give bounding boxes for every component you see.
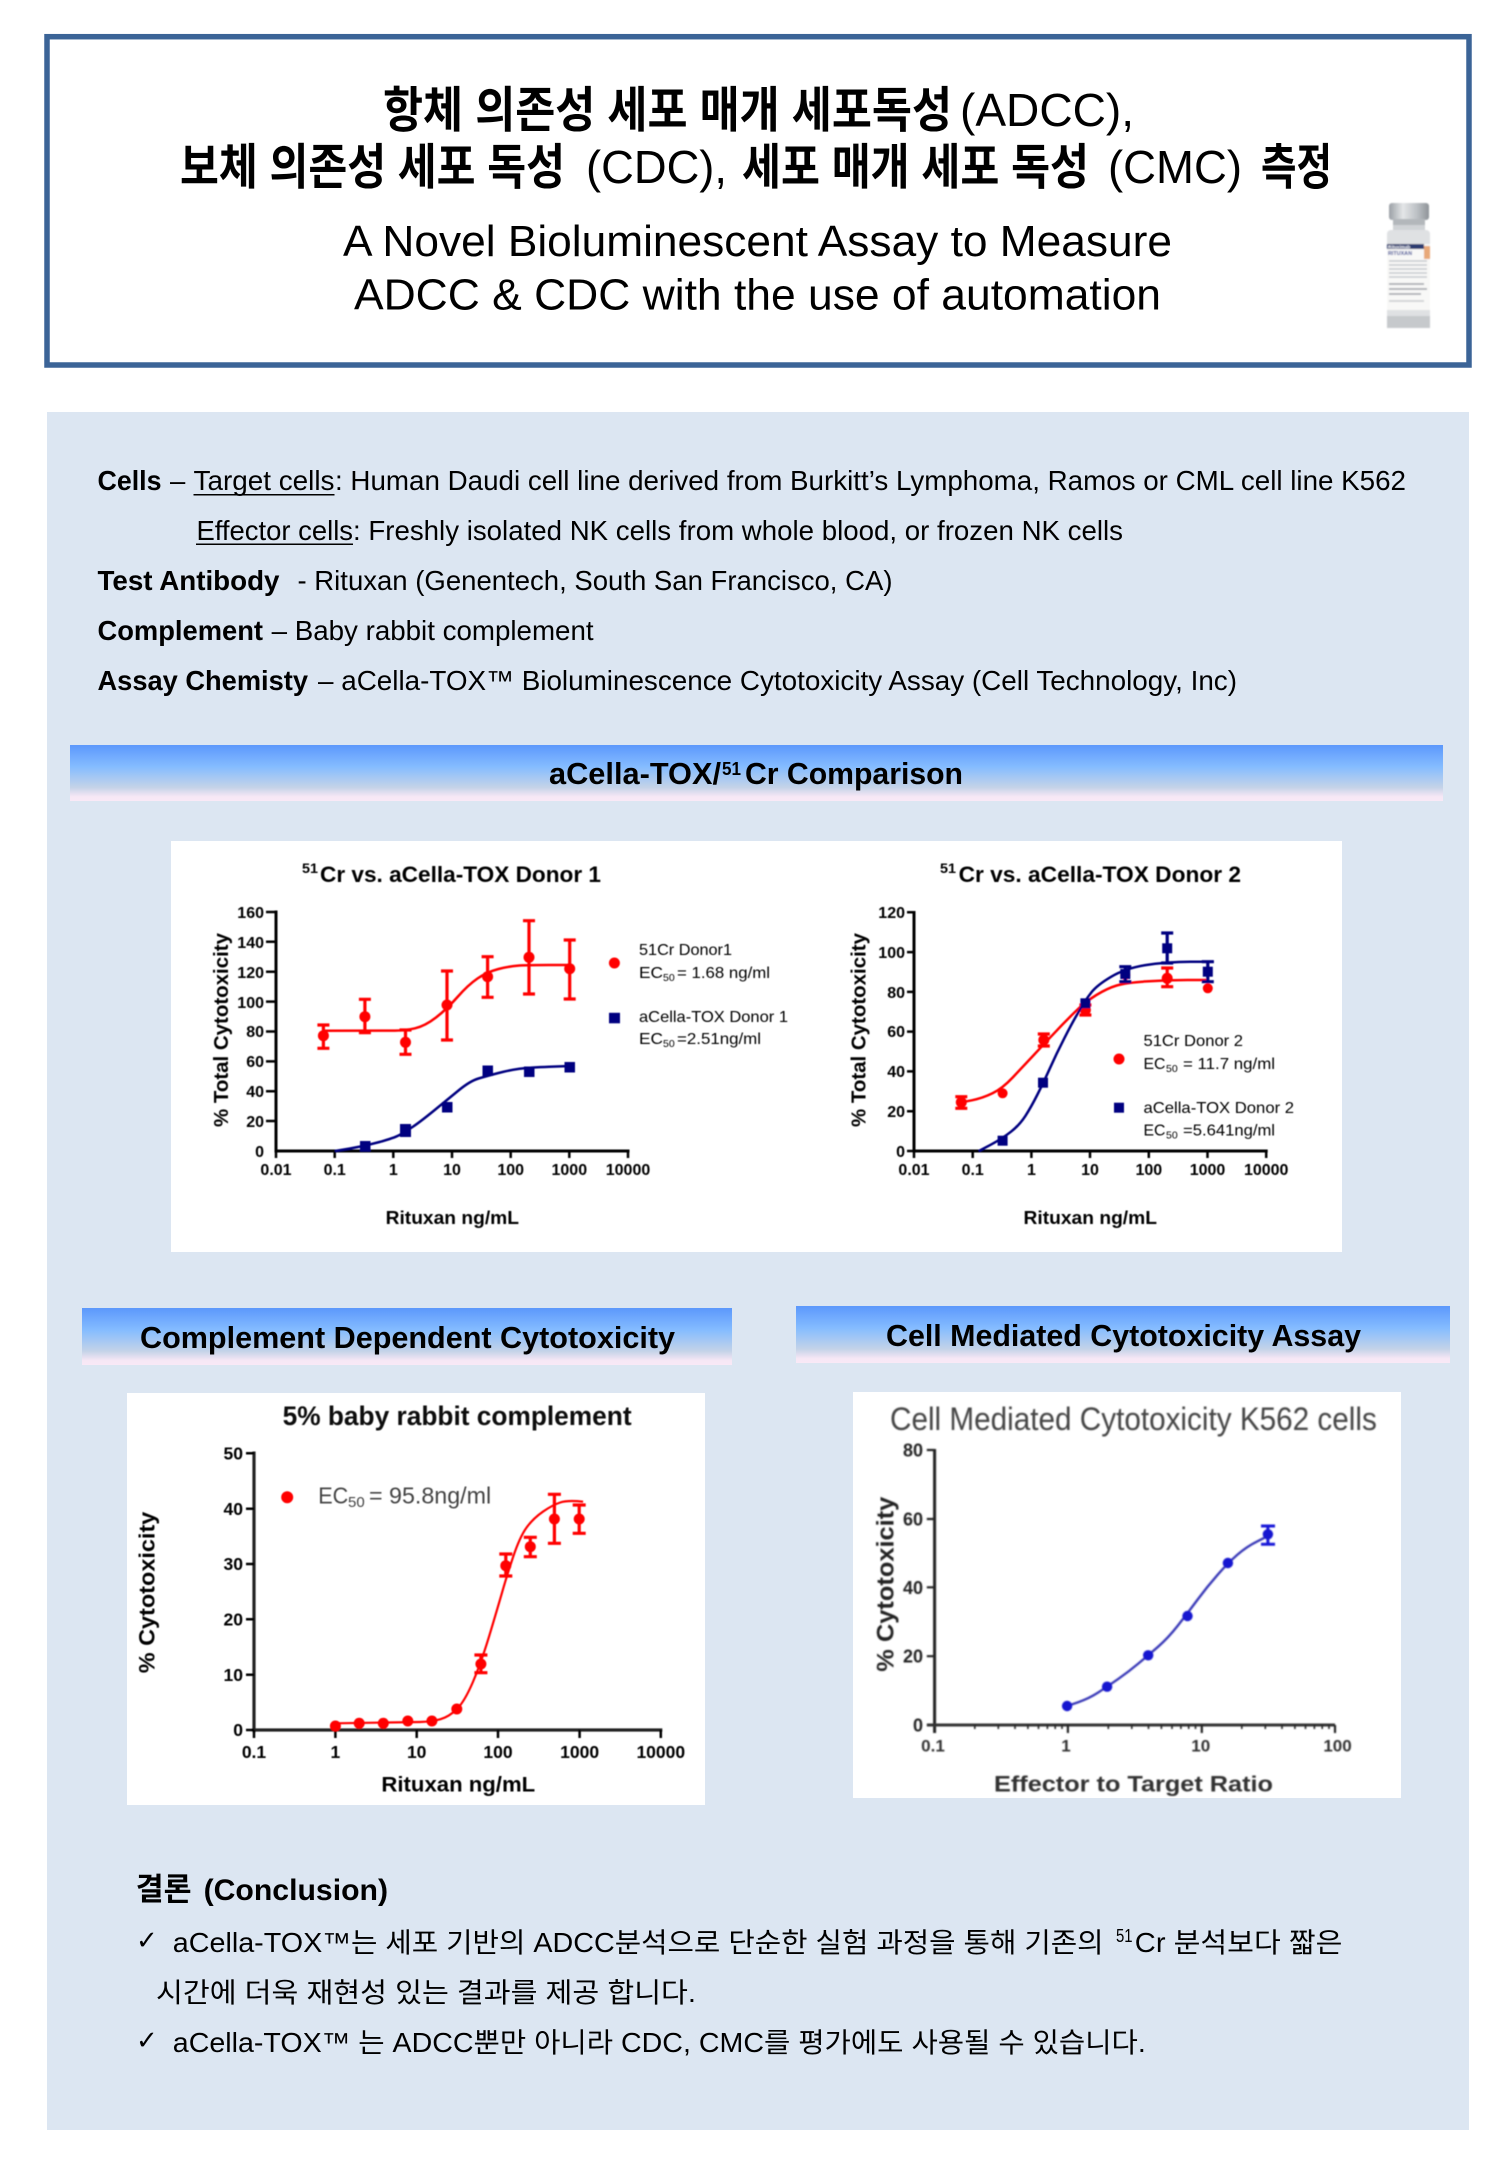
axes: 100 bbox=[483, 1742, 513, 1762]
row: assay chemistry: – aCella-TOX™ Bioluminescence Cytotoxicity Assay (Cell Technology, Inc) bbox=[318, 665, 1237, 696]
axes: 0.1 bbox=[921, 1737, 945, 1756]
axes: 80 bbox=[903, 1440, 923, 1460]
x axis label: Rituxan ng/mL bbox=[381, 1774, 535, 1797]
axes donor 1: 1000 bbox=[552, 1162, 587, 1179]
axes: 10 bbox=[224, 1665, 243, 1685]
chart title donor 2: 51 bbox=[940, 860, 956, 876]
axes: 10 bbox=[1191, 1737, 1210, 1756]
axes donor 2: 80 bbox=[887, 985, 905, 1002]
axes donor 2: 1 bbox=[1027, 1162, 1036, 1179]
heading banner: comparison: 51 bbox=[722, 759, 741, 779]
legend donor 2: EC bbox=[1144, 1123, 1166, 1140]
row: complement: Complement bbox=[98, 615, 263, 646]
y axis label: % Cytotoxicity bbox=[873, 1496, 900, 1672]
icon: Rituxan vial: RITUXAN bbox=[1388, 251, 1412, 257]
series: aCella-TOX donor 2 bbox=[979, 933, 1214, 1151]
axes: 30 bbox=[224, 1554, 243, 1574]
title line 1: 항체 의존성 세포 매개 세포독성 bbox=[383, 84, 952, 138]
row: cells target: : Human Daudi cell line derived from Burkitt’s Lymphoma, Ramos or CML cell line K562 bbox=[335, 465, 1406, 496]
axes donor 2: 100 bbox=[878, 945, 905, 962]
legend donor 2: EC bbox=[1144, 1056, 1166, 1073]
subtitle: ADCC & CDC with the use of automation bbox=[354, 270, 1161, 320]
axes donor 2: 20 bbox=[887, 1104, 905, 1121]
heading banner: comparison: Cr Comparison bbox=[745, 757, 963, 791]
legend donor 1: =2.51ng/ml bbox=[677, 1031, 761, 1048]
chart: cell mediated cytotoxicity bbox=[853, 1392, 1401, 1798]
axes: 0 bbox=[913, 1716, 923, 1736]
row: test antibody: Test Antibody bbox=[98, 565, 280, 596]
row: cells target: Target cells bbox=[194, 465, 334, 496]
header box bbox=[47, 37, 1469, 365]
legend: = 95.8ng/ml bbox=[369, 1482, 491, 1508]
legend donor 1: aCella-TOX Donor 1 bbox=[639, 1009, 788, 1026]
legend donor 1: EC bbox=[639, 1031, 663, 1048]
legend donor 1: 50 bbox=[663, 972, 675, 984]
legend donor 1: = 1.68 ng/ml bbox=[677, 965, 770, 982]
heading banner: cell mediated cytotoxicity: Cell Mediated Cytotoxicity Assay bbox=[886, 1319, 1361, 1353]
axes: 60 bbox=[903, 1510, 923, 1530]
subtitle bbox=[343, 217, 1172, 320]
legend donor 1: 50 bbox=[663, 1038, 675, 1050]
row: assay chemistry: Assay Chemisty bbox=[98, 665, 309, 696]
axes donor 2: 0.1 bbox=[962, 1162, 984, 1179]
axes: 100 bbox=[1323, 1737, 1352, 1756]
chart: donor 1 bbox=[211, 860, 788, 1228]
row: complement bbox=[98, 615, 594, 646]
legend donor 1 bbox=[609, 942, 788, 1050]
legend bbox=[281, 1482, 491, 1511]
axes donor 1: 10 bbox=[443, 1162, 461, 1179]
axes donor 1: 100 bbox=[237, 995, 264, 1012]
axes donor 2: 10000 bbox=[1244, 1162, 1289, 1179]
axes donor 1: 80 bbox=[246, 1024, 264, 1041]
bullet 1 bbox=[136, 1926, 1342, 2008]
axes donor 1: 140 bbox=[237, 935, 264, 952]
axes donor 2: 0.01 bbox=[898, 1162, 930, 1179]
axes donor 1: 0.01 bbox=[260, 1162, 292, 1179]
legend donor 2: 50 bbox=[1166, 1063, 1178, 1075]
axes bbox=[903, 1440, 1352, 1756]
axes donor 2: 1000 bbox=[1190, 1162, 1225, 1179]
axes donor 2: 10 bbox=[1081, 1162, 1099, 1179]
title line 2: (CDC), bbox=[586, 141, 727, 193]
axes donor 1: 0.1 bbox=[324, 1162, 346, 1179]
title line 2 bbox=[180, 141, 1332, 195]
axes donor 2 bbox=[878, 905, 1289, 1179]
axes: 1000 bbox=[560, 1742, 599, 1762]
heading banner: complement dependent cytotoxicity: Complement Dependent Cytotoxicity bbox=[140, 1321, 675, 1355]
chart: donor 2 bbox=[849, 860, 1294, 1228]
conclusion heading bbox=[136, 1872, 388, 1907]
axes donor 1: 100 bbox=[497, 1162, 524, 1179]
series: 51Cr donor 1 bbox=[317, 921, 576, 1054]
icon: Rituxan vial: Rituximab bbox=[1388, 245, 1410, 250]
bullet 1: 51 bbox=[1116, 1926, 1133, 1946]
axes: 40 bbox=[903, 1578, 923, 1598]
axes: 20 bbox=[224, 1610, 243, 1630]
axes: 0 bbox=[233, 1720, 243, 1740]
text block: materials bbox=[98, 465, 1406, 696]
axes donor 2: 100 bbox=[1135, 1162, 1162, 1179]
row: cells target: – bbox=[170, 465, 186, 496]
bullet 1: 시간에 더욱 재현성 있는 결과를 제공 합니다. bbox=[156, 1977, 696, 2008]
chart title: 5% baby rabbit complement bbox=[283, 1401, 632, 1431]
conclusion heading: 결론 bbox=[136, 1872, 192, 1907]
axes donor 1 bbox=[237, 905, 650, 1179]
axes: 10000 bbox=[636, 1742, 685, 1762]
chart title donor 1: Cr vs. aCella-TOX Donor 1 bbox=[320, 862, 601, 887]
x axis label: Effector to Target Ratio bbox=[994, 1772, 1273, 1797]
axes: 1 bbox=[331, 1742, 341, 1762]
axes donor 1: 120 bbox=[237, 965, 264, 982]
heading banner: complement dependent cytotoxicity bbox=[82, 1308, 732, 1365]
axes donor 1: 20 bbox=[246, 1114, 264, 1131]
bullet 1: Cr 분석보다 짧은 bbox=[1135, 1927, 1342, 1958]
axes donor 1: 1 bbox=[389, 1162, 398, 1179]
legend donor 1: EC bbox=[639, 965, 663, 982]
legend donor 2 bbox=[1114, 1033, 1294, 1142]
axes donor 1: 0 bbox=[255, 1144, 264, 1161]
bullet 1: aCella-TOX™는 세포 기반의 ADCC분석으로 단순한 실험 과정을 통해 기존의 bbox=[173, 1927, 1104, 1958]
chart title donor 2: Cr vs. aCella-TOX Donor 2 bbox=[959, 862, 1241, 887]
axes bbox=[224, 1444, 685, 1762]
axes donor 1: 10000 bbox=[606, 1162, 650, 1179]
axes: 1 bbox=[1061, 1737, 1071, 1756]
axes: 0.1 bbox=[242, 1742, 266, 1762]
text block: conclusion bbox=[136, 1872, 1342, 2058]
bullet 1: ✓ bbox=[136, 1926, 158, 1956]
bullet 2: ✓ bbox=[136, 2026, 158, 2056]
row: cells target: Cells bbox=[98, 465, 162, 496]
series: 51Cr donor 2 bbox=[955, 968, 1213, 1108]
legend: EC bbox=[318, 1482, 348, 1508]
series: cytotoxicity curve bbox=[1062, 1526, 1275, 1711]
subtitle: A Novel Bioluminescent Assay to Measure bbox=[343, 217, 1172, 266]
panel: comparison charts bbox=[171, 841, 1342, 1252]
axes: 10 bbox=[407, 1742, 427, 1762]
y axis label: % Cytotoxicity bbox=[134, 1511, 159, 1673]
heading banner: comparison bbox=[70, 745, 1443, 801]
row: complement: – Baby rabbit complement bbox=[272, 615, 594, 646]
chart title: Cell Mediated Cytotoxicity K562 cells bbox=[890, 1401, 1377, 1437]
axes: 50 bbox=[224, 1444, 243, 1464]
heading banner: comparison: aCella-TOX/ bbox=[549, 757, 722, 791]
axes donor 1: 60 bbox=[246, 1054, 264, 1071]
title line 2: 세포 매개 세포 독성 bbox=[742, 141, 1089, 195]
x axis label donor 1: Rituxan ng/mL bbox=[386, 1207, 519, 1228]
row: test antibody: - Rituxan (Genentech, South San Francisco, CA) bbox=[298, 565, 892, 596]
legend donor 2: =5.641ng/ml bbox=[1183, 1123, 1275, 1140]
axes donor 2: 0 bbox=[896, 1144, 905, 1161]
axes: 20 bbox=[903, 1646, 923, 1666]
title line 1: (ADCC), bbox=[960, 84, 1134, 136]
axes donor 1: 40 bbox=[246, 1084, 264, 1101]
legend donor 1: 51Cr Donor1 bbox=[639, 942, 732, 959]
heading banner: cell mediated cytotoxicity bbox=[796, 1306, 1450, 1363]
axes donor 2: 40 bbox=[887, 1064, 905, 1081]
conclusion heading: (Conclusion) bbox=[204, 1874, 388, 1907]
y axis label donor 1: % Total Cytotoxicity bbox=[211, 932, 233, 1127]
icon: Rituxan vial bbox=[1387, 203, 1430, 328]
title line 2: 측정 bbox=[1261, 141, 1332, 195]
row: effector cells: Effector cells bbox=[196, 515, 353, 546]
legend donor 2: 51Cr Donor 2 bbox=[1144, 1033, 1243, 1050]
title line 2: (CMC) bbox=[1108, 141, 1242, 193]
axes donor 1: 160 bbox=[237, 905, 264, 922]
axes donor 2: 60 bbox=[887, 1024, 905, 1041]
legend: 50 bbox=[348, 1494, 365, 1511]
y axis label donor 2: % Total Cytotoxicity bbox=[849, 932, 871, 1127]
series: aCella-TOX donor 1 bbox=[335, 1062, 575, 1152]
legend donor 2: = 11.7 ng/ml bbox=[1183, 1056, 1275, 1073]
axes donor 2: 120 bbox=[878, 905, 905, 922]
bullet 2: aCella-TOX™ 는 ADCC뿐만 아니라 CDC, CMC를 평가에도 사용될 수 있습니다. bbox=[173, 2027, 1146, 2058]
axes: 40 bbox=[224, 1499, 243, 1519]
chart title donor 1: 51 bbox=[302, 860, 318, 876]
legend donor 2: aCella-TOX Donor 2 bbox=[1144, 1100, 1294, 1117]
panel: main content background bbox=[47, 412, 1469, 2130]
chart: complement dependent cytotoxicity bbox=[127, 1393, 705, 1805]
row: effector cells: : Freshly isolated NK cells from whole blood, or frozen NK cells bbox=[353, 515, 1123, 546]
series: cytotoxicity curve bbox=[330, 1494, 586, 1732]
legend donor 2: 50 bbox=[1166, 1130, 1178, 1142]
x axis label donor 2: Rituxan ng/mL bbox=[1024, 1207, 1157, 1228]
title line 2: 보체 의존성 세포 독성 bbox=[180, 141, 565, 195]
